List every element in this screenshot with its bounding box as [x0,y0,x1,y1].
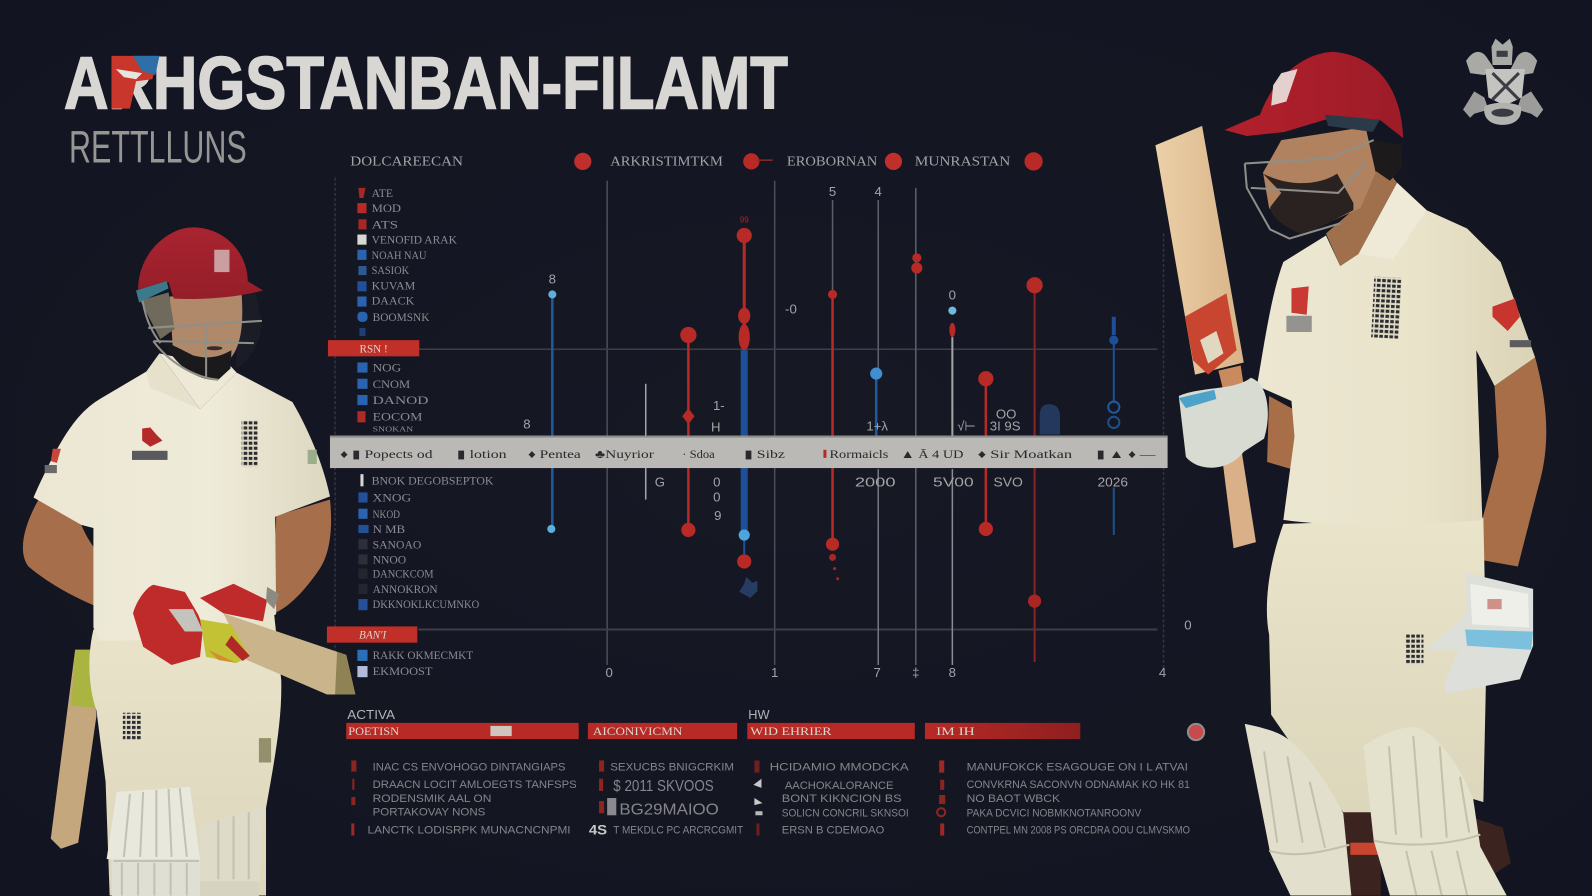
category list: top group [357,188,457,336]
axis values: 1 [771,665,778,680]
axis values: 0 [1184,617,1192,632]
category list: middle group [357,362,428,434]
bottom column 4: CONVKRNA SACONVN ODNAMAK KO HK 81 [967,779,1190,791]
bottom column 4: NO BAOT WBCK [967,793,1061,805]
lollipop chart: 0 [949,288,956,303]
lollipop chart: 4 [875,184,882,199]
face [170,294,242,366]
bottom panel: red header bars: IM IH [936,726,975,738]
chart legend header [350,152,1043,171]
back arm [1472,357,1546,567]
lollipop chart: -0 [785,302,797,317]
chart grid [335,178,1164,675]
front bat [223,613,355,694]
category list: lower group: NKOD [373,509,400,521]
chart legend header: ARKRISTIMTKM [610,153,723,168]
category list: top group: NOAH NAU [372,250,426,262]
category list: lower group: DKKNOKLKCUMNKO [373,599,479,611]
axis values: 0 [713,474,720,489]
category list: middle group: NOG [373,363,401,375]
bottom column 2: BG29MAIOO [619,801,719,818]
crest emblem [1463,39,1543,125]
lollipop chart: 1+λ [866,418,888,433]
red label: group one [328,340,419,356]
category list: lower group: XNOG [373,493,411,505]
shirt [1257,183,1535,525]
axis values: ‡ [912,665,919,680]
bottom column 4: CONTPEL MN 2008 PS ORCDRA OOU CLMVSKMO [967,825,1190,837]
gray key band [330,436,1168,468]
lollipop chart: H [711,420,721,435]
category list: lower group: BNOK DEGOBSEPTOK [372,475,493,487]
gray key band: ▮ ▲ ♦ — [1097,448,1156,461]
gray key band: ▲ Ā 4 UD [901,448,964,461]
bottom column 2 [589,760,743,839]
red label: group two: BAN'I [359,630,387,642]
bottom column 3: ERSN B CDEMOAO [782,825,885,837]
axis values: 2000 [855,474,895,489]
axis values: 4 [1159,665,1166,680]
shirt [34,372,330,641]
category list: top group: BOOMSNK [373,312,429,324]
lollipop chart [523,184,1119,665]
bottom panel: red header bars [346,723,1080,739]
leg pads [107,787,200,859]
subtitle: RETTLLUNS [69,121,247,172]
beard [1263,174,1353,236]
hair [1371,140,1402,181]
axis values: 2026 [1098,474,1128,489]
red label: group two [327,626,417,643]
bottom column 2: $ 2011 SKVOOS [613,778,714,795]
category list: middle group: CNOM [373,379,410,391]
title: ARHGSTANBAN-FILAMT [64,42,788,125]
category list: top group: MOD [372,203,401,215]
category list: bottom group: EKMOOST [373,666,433,678]
face [1263,127,1376,234]
lollipop chart: 1- [713,398,725,413]
category list: top group: SASIOK [372,265,409,277]
bottom column 3: BONT KIKNCION BS [782,793,902,805]
category list: bottom group: RAKK OKMECMKT [373,650,473,662]
category list: top group: ATE [372,188,393,200]
gray key band: ▮ Sibz [744,448,785,461]
chart legend header: EROBORNAN [787,153,878,168]
dark leg straps [1475,818,1511,875]
status dot [1188,724,1204,740]
bottom column 1 [351,760,577,837]
bottom column 1: INAC CS ENVOHOGO DINTANGIAPS [373,762,566,774]
bottom column 1: LANCTK LODISRPK MUNACNCNPMI [368,825,571,837]
bottom column 3: AACHOKALORANCE [785,780,893,792]
gray key band: ♦ ▮ Popects od [340,448,433,461]
axis values: 8 [949,665,956,680]
category list: middle group: EOCOM [373,411,422,423]
axis values: G [655,474,665,489]
category list: lower group: DANCKCOM [373,569,434,581]
bottom column 3: HCIDAMIO MMODCKA [770,762,909,774]
bottom panel headings: ACTIVA [347,707,395,722]
gray key band: Rormaicls [830,448,889,461]
category list: top group: VENOFID ARAK [372,235,457,247]
bottom column 2: SEXUCBS BNIGCRKIM [610,762,734,774]
bottom panel: red header bars: AICONIVICMN [593,726,682,738]
face cage [1245,140,1374,239]
bottom panel headings [347,707,770,722]
gray key band: · Sdoa [682,448,716,461]
gray key band: ♦ Sir Moatkan [978,448,1072,461]
lollipop chart: 8 [549,271,556,286]
lollipop chart: OO [996,406,1016,421]
bottom column 1: DRAACN LOCIT AMLOEGTS TANFSPS [373,779,577,791]
bottom column 4: PAKA DCVICI NOBMKNOTANROONV [967,807,1142,819]
chart legend header: MUNRASTAN [915,153,1011,168]
bottom column 1: PORTAKOVAY NONS [373,806,485,818]
arms [23,500,147,619]
lollipop chart: 8 [523,416,531,431]
bottom column 2: 4S [589,823,607,839]
gray key band: ▮ lotion [457,448,507,461]
category list: bottom group [357,650,473,678]
left player [23,227,355,896]
category list: top group: ATS [372,219,398,231]
neck [1326,162,1397,266]
bottom column 3 [753,760,909,837]
category list: middle group: SNOKAN [373,426,413,434]
category list: lower group: ANNOKRON [373,584,438,596]
category list: lower group: SANOAO [373,539,421,551]
bottom panel headings: HW [748,707,770,722]
bottom panel: red header bars: POETISN [348,726,399,738]
helmet cap [1224,52,1403,138]
batting gloves [1179,378,1268,468]
bottom column 2: T MEKDLC PC ARCRCGMIT [613,825,743,837]
bottom panel: red header bars: WID EHRIER [750,726,832,738]
trousers [89,614,281,895]
bottom column 3: SOLICN CONCRIL SKNSOI [782,807,909,819]
bottom column 1: RODENSMIK AAL ON [373,793,491,805]
axis values: SVO [993,474,1023,489]
bottom column 4 [937,760,1190,837]
axis values: 9 [714,508,721,523]
axis values: 0 [713,490,720,505]
lollipop chart: 99 [740,215,749,224]
trousers [1267,518,1486,812]
category list: lower group: N MB [373,524,405,536]
category list: lower group [358,474,493,611]
gray key band: ♣Nuyrior [595,448,654,461]
raised bat [1155,126,1244,375]
lollipop chart: 3I 9S [990,418,1021,433]
lollipop chart: √⊢ [957,418,976,433]
axis values [606,469,1192,680]
cap [138,227,263,299]
chart legend header: DOLCAREECAN [350,153,464,168]
category list: top group: KUVAM [372,280,415,292]
back bat [51,650,96,849]
right player [1155,52,1546,895]
bottom column 4: MANUFOKCK ESAGOUGE ON I L ATVAI [967,762,1188,774]
lollipop chart: 5 [829,184,836,199]
helmet shadow [236,293,262,370]
axis values: 5V00 [933,474,974,489]
front pads [1245,724,1351,895]
gray key band: ♦ Pentea [528,448,582,461]
category list: middle group: DANOD [373,395,428,407]
axis values: 7 [874,665,881,680]
category list: top group: DAACK [372,296,414,308]
gloves [133,585,203,665]
axis values: 0 [606,665,613,680]
category list: lower group: NNOO [373,554,406,566]
red label: group one: RSN ! [360,343,388,355]
